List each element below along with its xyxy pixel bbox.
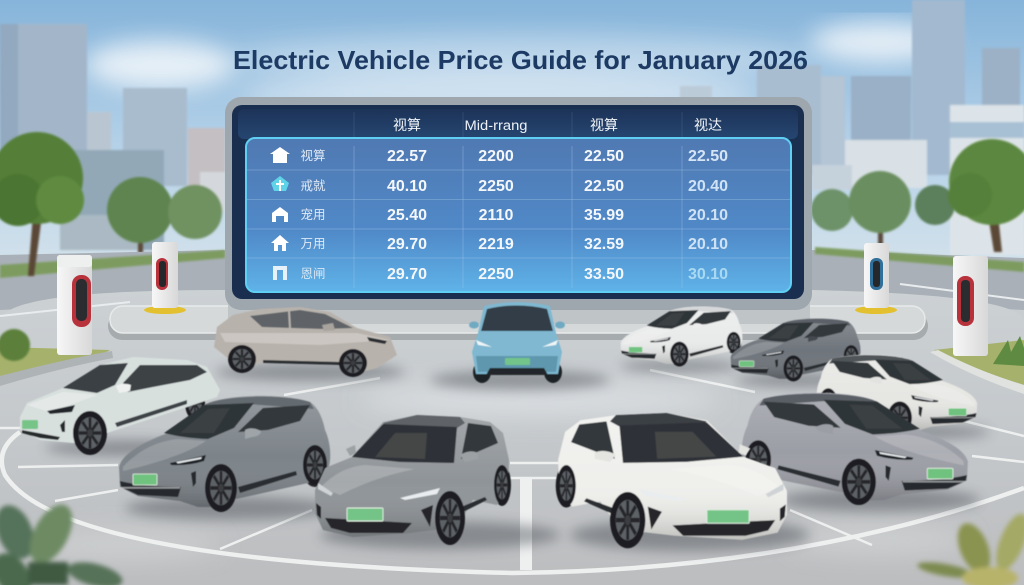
foreground tree left xyxy=(0,132,84,276)
car: front white xyxy=(556,413,787,548)
row 1: 22.50 xyxy=(688,148,728,165)
car: silver right xyxy=(742,393,968,505)
row 5 xyxy=(273,266,728,283)
circular dais under screen xyxy=(108,306,928,340)
screen plinth xyxy=(228,296,810,324)
skyline: right buildings xyxy=(680,0,1024,255)
charger: far left xyxy=(57,255,92,355)
foreground leaves right xyxy=(916,510,1024,585)
display screen xyxy=(225,97,812,324)
row 3: 20.10 xyxy=(688,207,728,224)
screen interior xyxy=(232,105,804,299)
screen frame xyxy=(225,97,812,310)
row 3 xyxy=(272,207,728,224)
table header band: 视算 xyxy=(393,117,421,133)
row 3: 宠用 xyxy=(300,207,326,222)
plaza reflections xyxy=(20,382,970,559)
grass strips xyxy=(0,247,1024,278)
table header band xyxy=(238,109,798,139)
road xyxy=(0,250,1024,310)
table header band: Mid-rrang xyxy=(464,118,528,133)
row 2: 20.40 xyxy=(688,178,728,195)
sky background xyxy=(0,0,1024,290)
row 2 xyxy=(271,176,728,195)
parking ring markings xyxy=(0,370,1024,573)
table header band: 视达 xyxy=(694,117,722,133)
row 1: 22.50 xyxy=(584,148,624,165)
row 5: 33.50 xyxy=(584,266,624,283)
left grass bed with bush xyxy=(0,329,113,386)
row 3: 25.40 xyxy=(387,207,427,224)
car shadows xyxy=(45,360,990,551)
row 2: 2250 xyxy=(478,178,514,195)
title: Electric Vehicle Price Guide for January 2026 xyxy=(233,45,808,75)
car: gray left xyxy=(119,396,330,512)
right grass bed with palm plant xyxy=(930,336,1024,394)
row 2: 40.10 xyxy=(387,178,427,195)
row 1: 视算 xyxy=(300,148,326,163)
foreground tree right xyxy=(948,139,1024,252)
row 1: 2200 xyxy=(478,148,514,165)
charger: back left xyxy=(144,242,186,314)
row 5: 29.70 xyxy=(387,266,427,283)
table panel xyxy=(246,138,791,292)
charger: far right xyxy=(953,256,988,356)
car: center teal front view xyxy=(469,302,565,383)
car: back left beige xyxy=(214,307,397,377)
foreground leaves left xyxy=(0,498,125,585)
row 4: 万用 xyxy=(300,237,326,251)
charger: back right xyxy=(855,243,897,314)
row 5: 恩闸 xyxy=(300,267,326,281)
row 1 xyxy=(270,147,728,165)
trees background xyxy=(107,171,955,257)
plaza ground xyxy=(0,290,1024,585)
car: front gray xyxy=(315,415,511,545)
row 4 xyxy=(271,235,728,253)
row 2: 戒就 xyxy=(300,178,326,193)
car: back right dark xyxy=(731,319,861,381)
row 3: 2110 xyxy=(479,207,513,224)
car: right white xyxy=(817,355,977,434)
row 4: 32.59 xyxy=(584,236,624,253)
row 5: 30.10 xyxy=(688,266,728,283)
road lane stripes xyxy=(0,284,1024,316)
car: back right white xyxy=(621,306,742,366)
row 4: 29.70 xyxy=(387,236,427,253)
car: left white xyxy=(20,357,220,455)
skyline: left buildings xyxy=(0,24,225,250)
row 4: 20.10 xyxy=(688,236,728,253)
row 1: 22.57 xyxy=(387,148,427,165)
clouds xyxy=(85,22,950,117)
row 4: 2219 xyxy=(478,236,514,253)
table header band: 视算 xyxy=(590,117,618,133)
row 2: 22.50 xyxy=(584,178,624,195)
row 3: 35.99 xyxy=(584,207,624,224)
row 5: 2250 xyxy=(478,266,514,283)
